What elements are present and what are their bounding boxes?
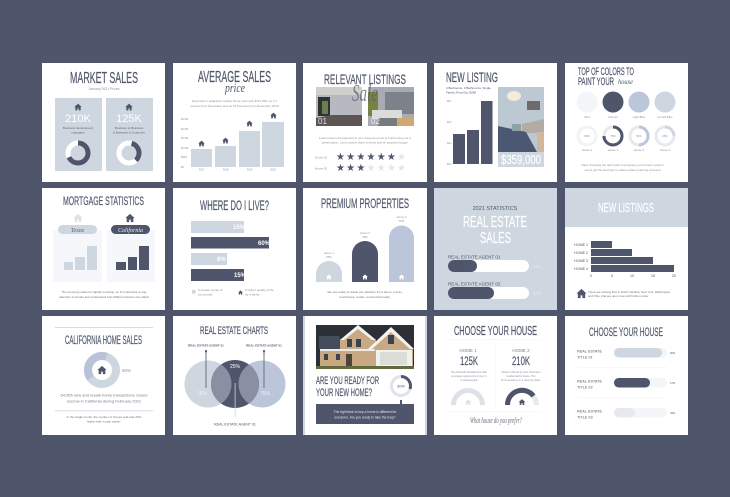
panel: relevant listings: presumption. Lorem ipsum dolor sit amet and be acquired longer. [322, 140, 408, 144]
home 2: residential for loans. The [506, 374, 536, 378]
progress: agent 02: 50% [533, 291, 542, 296]
row: title 03: TITLE 03 [577, 416, 593, 420]
arch chart: Home 2 [360, 231, 370, 235]
legend: community [198, 292, 213, 296]
row: title 02 [577, 378, 676, 390]
header band [565, 188, 688, 227]
horizontal bar chart: 10 [630, 274, 634, 278]
panel: market sales [42, 63, 165, 182]
heading: choose your house: CHOOSE YOUR HOUSE [454, 323, 537, 338]
heading: choose your house: CHOOSE YOUR HOUSE [589, 325, 663, 339]
donut labels: House 4 [660, 148, 671, 152]
home 1: a unique opportunity to live in [452, 374, 487, 378]
panel: california home sales: escrow in California during February 2021 [67, 398, 142, 404]
arch chart: 45% [362, 235, 368, 239]
description: December's statewide median home price was $711,090, up 2.7 [192, 99, 277, 103]
heading: average sales: AVERAGE SALES [198, 69, 271, 86]
progress: agent 02 [448, 282, 542, 299]
panel: top of colors: we've got the best tips to make outdoor painting a breeze. [585, 168, 662, 172]
panel: premium properties: townhouse, rental, commercial realty. [339, 295, 391, 299]
arch chart [316, 215, 414, 282]
arch chart: Home 1 [324, 251, 334, 255]
heading: relevant listings: RELEVANT LISTINGS [324, 71, 406, 87]
heading: where do i live: WHERE DO I LIVE? [200, 197, 269, 213]
row dividers [577, 368, 667, 398]
row: title 01: REAL ESTATE [577, 350, 603, 354]
horizontal bars: 8% [217, 257, 226, 263]
venn diagram [184, 360, 286, 408]
heading: top of colors: house [618, 78, 633, 86]
bar chart: listing: $4m [447, 121, 452, 124]
horizontal bar chart: 0 [590, 274, 592, 278]
home 2: 210K [512, 354, 530, 368]
stat card: 125K: 125K [116, 113, 143, 125]
row: title 01 [577, 348, 676, 360]
panel: are you ready [303, 316, 427, 435]
home 2: What it offered by San Francisco [502, 370, 541, 374]
row: title 02: 67% [670, 381, 676, 385]
panel: real estate charts [173, 316, 296, 435]
footnote: In the single month, the number of homes sold was 20% [67, 415, 142, 419]
photo: living room [498, 87, 544, 152]
bar chart: listing [447, 100, 492, 166]
icon: house [576, 289, 587, 298]
horizontal bars [191, 221, 271, 281]
progress: agent 02: REAL ESTATE AGENT 02 [448, 282, 501, 286]
bar chart: sales by year: 2017 [199, 168, 205, 172]
row: title 03: REAL ESTATE [577, 410, 603, 414]
bar chart: sales by year: 2019 [247, 168, 253, 172]
horizontal bar chart: HOME 3 [574, 259, 588, 263]
horizontal bar chart: 5 [611, 274, 613, 278]
bar chart: listing: $0m [447, 163, 452, 166]
stat card: 210K: 210K [65, 113, 92, 125]
bar chart: sales by year: $1.0M [181, 146, 188, 150]
home 2: HOME 2 [512, 348, 530, 353]
arch chart: 25% [326, 255, 332, 259]
horizontal bars: 15% [233, 225, 246, 231]
panel: choose your house progress [565, 316, 688, 435]
horizontal bar chart: 20 [672, 274, 676, 278]
home 1: The Pacaslic Residences offer [451, 370, 487, 374]
heading: top of colors: TOP OF COLORS TO [578, 66, 634, 78]
subtitle: January 2021 Prices [89, 87, 120, 91]
horizontal bar chart: HOME 1 [574, 243, 588, 247]
mortgage chart: california: California [118, 227, 143, 234]
bar chart: sales by year: $500 [181, 155, 187, 159]
bar chart: sales by year: 2020 [270, 168, 276, 172]
callout box [316, 400, 414, 424]
horizontal bar chart [574, 241, 676, 278]
venn diagram: 25% [230, 364, 241, 370]
bar chart: listing: $2m [447, 142, 452, 145]
heading: are you ready: ARE YOU READY FOR [316, 375, 379, 387]
panel: real estate sales [434, 188, 557, 310]
row: title 01: TITLE 01 [577, 356, 593, 360]
rating rows: ★★★★★★★ [336, 152, 406, 163]
bar chart: listing: $6m [447, 100, 452, 103]
home 2: Promenade is in a class by itself. [501, 378, 541, 382]
panel: new listing [434, 63, 557, 182]
panel: where do i live [173, 188, 296, 310]
panel: average sales: percent from November and up 16.8 percent from December 2019 [190, 104, 279, 108]
panel: california home sales [42, 316, 165, 435]
home 1: HOME 1 [459, 348, 477, 353]
venn diagram: 75% [260, 391, 271, 397]
panel: new listing: Family, Price/Sq: $298 [446, 90, 476, 94]
photo: kitchen: 02 [371, 117, 380, 126]
description: 4 Bedrooms, 3 Bathrooms, Single [446, 86, 491, 90]
colour swatches: Flannel [608, 115, 618, 119]
callout: agent left: REAL ESTATE AGENT 01 [188, 344, 224, 348]
mortgage chart: texas: Texas [71, 228, 85, 234]
donut labels: 25% [662, 134, 668, 138]
bar chart: sales by year: 2018 [223, 168, 229, 172]
donut chart: 60%: 60% [122, 368, 131, 373]
rating rows [315, 152, 406, 174]
heading: real estate sales: REAL ESTATE [463, 214, 527, 231]
description: We are ready to assist you whether it's a home, condo, [327, 290, 403, 294]
bottom rule [55, 410, 153, 412]
legend [192, 288, 274, 296]
bar chart: sales by year: $2.0M [181, 127, 188, 131]
horizontal bar chart: HOME 2 [574, 251, 588, 255]
panel: average sales [173, 63, 296, 182]
horizontal bars: 60% [258, 241, 271, 247]
heading: california home sales: CALIFORNIA HOME SALES [65, 333, 142, 347]
heading: mortgage statistics: MORTGAGE STATISTICS [63, 194, 144, 208]
heading: top of colors [578, 66, 634, 88]
horizontal bars: 15% [234, 273, 247, 279]
row: title 02: REAL ESTATE [577, 380, 603, 384]
heading: are you ready [316, 375, 379, 399]
description: The housing market is rapidly evolving, so it's important to pay [61, 290, 147, 294]
callout box: The right time to buy a home is different for [334, 410, 397, 414]
callout: agent right: REAL ESTATE AGENT 01 [246, 344, 282, 348]
heading: market sales: MARKET SALES [70, 70, 138, 87]
progress: agent 01 [448, 254, 542, 272]
price tag: $359,000 [501, 153, 541, 167]
heading: new listings: NEW LISTINGS [598, 200, 654, 215]
row: title 03: 39% [670, 411, 676, 415]
panel: premium properties [303, 188, 427, 310]
photo: empty room: 01 [318, 117, 327, 126]
panel: mortgage statistics: attention to trends and understand how different factors can affect [59, 295, 149, 299]
panel: top of colors [565, 63, 688, 182]
script: price: price [224, 80, 245, 95]
home 1 [451, 348, 487, 405]
heading: top of colors: PAINT YOUR [578, 76, 614, 88]
legend: A higher quality of life [245, 288, 274, 292]
donut charts: houses [578, 127, 674, 145]
horizontal bar chart: 15 [651, 274, 655, 278]
heading: real estate sales [463, 214, 527, 247]
arch chart: 70% [399, 219, 405, 223]
stat card: 210K [55, 98, 102, 171]
description: Paint choosing the right paint to prepping your home's exterior, [581, 163, 665, 167]
bar chart: sales by year: $1.5M [181, 136, 188, 140]
legend: A greater sense of [198, 288, 223, 292]
rating rows: Home 02 [315, 166, 328, 170]
donut chart: 30%: 30% [397, 384, 405, 388]
photo: house [316, 325, 414, 369]
panel: new listings: and Ohio, that are open now until further notice. [588, 294, 649, 298]
donut labels [582, 134, 671, 152]
description: Lorem ipsum the payment to you. Keep as an art to build money as a [319, 136, 411, 140]
heading: real estate sales: SALES [480, 230, 511, 247]
stat card: 125K [106, 98, 153, 171]
rating rows: ★★★★★★★ [336, 163, 406, 174]
colour swatches [576, 92, 676, 119]
venn diagram: 15% [197, 391, 208, 397]
panel: mortgage statistics [42, 188, 165, 310]
bar chart: sales by year [181, 113, 284, 172]
home 2 [501, 348, 541, 405]
panel: new listings [565, 188, 688, 310]
home 1: 125K [460, 354, 478, 368]
divider lines [447, 339, 543, 412]
row: title 03 [577, 408, 676, 420]
progress: agent 01: 25% [533, 264, 542, 269]
donut labels: 75% [610, 134, 616, 138]
colour swatches: Cornell Blue [657, 115, 673, 119]
colour swatches: Light Blue [633, 115, 646, 119]
heading: real estate charts: REAL ESTATE CHARTS [200, 325, 268, 337]
panel: relevant listings [303, 63, 427, 182]
donut labels: House 1 [582, 148, 593, 152]
row: title 02: TITLE 02 [577, 386, 593, 390]
heading: premium properties: PREMIUM PROPERTIES [321, 195, 409, 211]
row: title 01: 90% [670, 351, 676, 355]
callout box: everyone. Are you ready to take the leap? [334, 416, 396, 420]
stat card: 210K: Business development [63, 126, 93, 130]
script: sale: Sale [352, 81, 378, 107]
panel: choose your house comparison [434, 316, 557, 435]
progress: agent 01: REAL ESTATE AGENT 01 [448, 254, 501, 260]
stat card: 125K: & Business to Customer [113, 130, 145, 134]
description: There are existing lists in North Carolina, New York, Washington, [588, 290, 671, 294]
bar chart: sales by year: $0 [181, 165, 184, 169]
rating rows: Home 01 [315, 156, 328, 160]
donut labels: 98% [584, 134, 590, 138]
donut labels: House 2 [608, 148, 619, 152]
heading: are you ready: YOUR NEW HOME? [316, 387, 372, 399]
horizontal bar chart: HOME 4 [574, 267, 588, 271]
script: tagline: What house do you prefer? [470, 416, 522, 425]
heading: new listing: NEW LISTING [446, 69, 498, 85]
top rule [55, 326, 153, 329]
colour swatches: Sled [584, 115, 590, 119]
callout: agent bottom: REAL ESTATE AGENT 01 [214, 422, 256, 426]
bar chart: sales by year: $2.5M [181, 117, 188, 121]
arch chart: Home 3 [397, 215, 407, 219]
stat card: 125K: Business to Business [115, 126, 144, 130]
donut labels: 50% [636, 134, 642, 138]
stat card: 210K: managers [71, 130, 85, 134]
panel: california home sales: higher than a year earlier. [87, 420, 121, 424]
home 1: a relaxed park [460, 378, 478, 382]
donut labels: House 3 [634, 148, 645, 152]
subtitle: 2021 STATISTICS [473, 206, 518, 212]
description: 54,955 new and resale home transactions closed [61, 392, 147, 398]
legend: for a family [245, 292, 260, 296]
